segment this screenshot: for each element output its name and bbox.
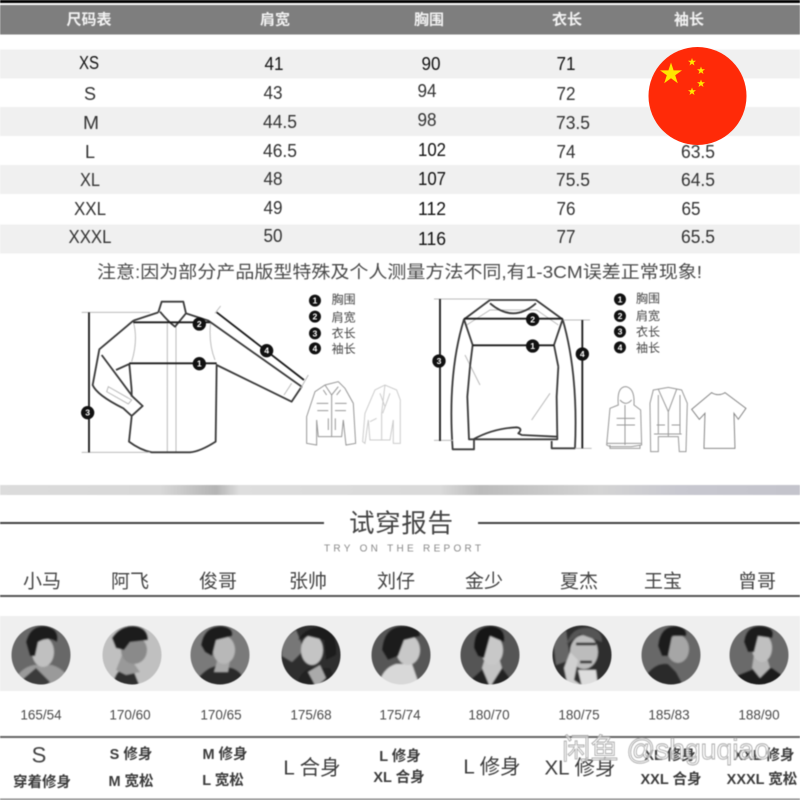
row: XXXL	[0, 224, 800, 254]
row: XL: 48	[264, 169, 282, 189]
fit report row: XL 修身	[544, 756, 616, 780]
height / weight row: 180/70	[468, 708, 510, 722]
icon: hoodie	[607, 387, 642, 448]
names row: 曾哥	[738, 570, 776, 592]
names row: 俊哥	[199, 570, 237, 592]
legend: 衣长	[332, 325, 356, 340]
badge 4: 4	[264, 346, 269, 356]
measure guides	[434, 299, 592, 448]
fit report row: M 宽松	[108, 772, 154, 790]
legend: 1	[618, 294, 623, 304]
watermark: 闲鱼 @shguqiao	[562, 733, 770, 766]
fit report row: L 修身	[379, 747, 421, 765]
table header: 胸围	[414, 12, 444, 28]
badge 1: 1	[530, 341, 535, 351]
legend	[614, 291, 660, 355]
row: XXXL: 77	[556, 227, 576, 247]
row: S	[84, 81, 576, 104]
row: XXXL: 50	[264, 226, 282, 246]
fit report row: XL 修身	[644, 746, 696, 764]
portrait: 小马	[9, 623, 73, 687]
measurement note: 注意:因为部分产品版型特殊及个人测量方法不同,有1-3CM误差正常现象!	[97, 262, 702, 282]
row: XXL: XXL	[74, 199, 106, 219]
measure lines	[89, 312, 304, 452]
icon: blazer	[363, 385, 400, 443]
height / weight row	[0, 708, 800, 738]
fit report row: L 修身	[463, 756, 521, 778]
table header: 袖长	[674, 10, 704, 28]
legend: 衣长	[636, 324, 660, 339]
badge 1: 1	[197, 359, 202, 369]
badge 4	[260, 344, 273, 357]
table header	[0, 5, 800, 34]
badge 3	[81, 406, 94, 419]
fit report row: XXXL 宽松	[727, 770, 798, 788]
row: XL: XL	[80, 170, 100, 190]
legend: 1	[313, 296, 318, 306]
sweater outline	[451, 300, 576, 449]
badge 1	[193, 357, 206, 370]
row: XXXL: 116	[418, 229, 446, 249]
height / weight row: 188/90	[738, 708, 780, 722]
row: M: 44.5	[263, 112, 297, 132]
fit report row: S	[32, 742, 46, 768]
fit report row: M 修身	[202, 745, 248, 763]
legend: 2	[313, 312, 318, 322]
fit report row: L 宽松	[202, 771, 244, 789]
row: XXL: 49	[264, 198, 282, 218]
height / weight row: 175/68	[290, 708, 332, 722]
legend	[309, 291, 356, 356]
names row: 夏杰	[560, 570, 598, 592]
height / weight row: 170/65	[200, 708, 242, 722]
names row	[0, 570, 800, 597]
legend: 肩宽	[332, 309, 356, 324]
height / weight row: 185/83	[648, 708, 690, 722]
fit report row: XXL 修身	[734, 746, 794, 764]
names row: 刘仔	[377, 570, 415, 592]
table header: 尺码表	[66, 10, 112, 28]
badge 4: 4	[580, 349, 585, 359]
row: XXL: 76	[556, 199, 576, 219]
legend: 肩宽	[636, 308, 660, 323]
diagram: shirt measurement	[81, 291, 400, 452]
measure lines	[440, 299, 582, 448]
row: XXXL: 65.5	[681, 227, 715, 247]
row: S: 72	[556, 84, 576, 104]
row: L: 46.5	[263, 141, 297, 161]
fit report row: XL 合身	[373, 768, 425, 786]
icon: t-shirt	[692, 393, 746, 448]
names row: 阿飞	[111, 570, 149, 592]
badge 3	[432, 354, 446, 368]
portrait: 张帅	[279, 623, 343, 687]
row: XXL	[74, 198, 700, 219]
row: XXL: 65	[682, 199, 700, 219]
portrait: 夏杰	[550, 623, 614, 687]
badge 2: 2	[197, 319, 202, 329]
diagram: sweater measurement	[432, 291, 746, 452]
row: L: 102	[418, 140, 446, 160]
badge 1	[526, 339, 539, 353]
row: XS: 90	[422, 54, 440, 74]
row: XL	[0, 165, 800, 194]
portrait: 刘仔	[370, 624, 432, 684]
table header: 衣长	[552, 10, 582, 28]
row: M: M	[83, 113, 99, 133]
row: L: 74	[556, 142, 576, 162]
decorative gray band	[0, 485, 800, 495]
height / weight row: 170/60	[109, 708, 151, 722]
icon: cardigan	[650, 387, 687, 452]
row: M: 73.5	[556, 113, 590, 133]
badge 2: 2	[530, 314, 535, 324]
legend: 胸围	[332, 291, 356, 306]
row: XS: 41	[264, 54, 284, 74]
fit report row	[0, 742, 800, 800]
row: L	[85, 140, 715, 162]
row: L: 63.5	[681, 142, 715, 162]
row: XL: 64.5	[681, 170, 715, 190]
portrait: 俊哥	[188, 623, 252, 687]
table header: 肩宽	[260, 10, 290, 28]
badge 3: 3	[85, 408, 90, 418]
row: XS	[0, 50, 800, 78]
legend: 胸围	[636, 291, 660, 306]
row: L: L	[85, 142, 95, 162]
row: XXL: 112	[418, 199, 446, 219]
measure guides	[82, 306, 308, 452]
icon: denim jacket	[307, 382, 356, 445]
names row: 张帅	[289, 570, 327, 592]
section heading: TRY ON THE REPORT	[324, 544, 481, 554]
height / weight row: 165/54	[20, 708, 62, 722]
portrait: 金少	[458, 623, 522, 687]
row: M	[0, 107, 800, 136]
names row: 小马	[23, 570, 61, 592]
fit report row: XXL 合身	[641, 770, 701, 788]
legend: 3	[313, 328, 318, 338]
row: XS: XS	[79, 53, 99, 73]
height / weight row: 180/75	[558, 708, 600, 722]
portrait: 曾哥	[727, 623, 791, 687]
row: S: 43	[264, 83, 282, 103]
top black rule	[0, 0, 800, 3]
size table	[0, 5, 800, 254]
legend: 2	[618, 311, 623, 321]
names row: 王宝	[644, 570, 682, 592]
badge 3: 3	[437, 356, 442, 366]
section heading: 试穿报告	[349, 510, 453, 538]
legend: 4	[618, 342, 623, 352]
legend: 3	[618, 327, 623, 337]
fit report row: L 合身	[283, 756, 341, 780]
names row: 金少	[465, 570, 503, 592]
badge 2	[526, 313, 539, 326]
row: S: S	[84, 84, 96, 104]
fit report row: S 修身	[110, 745, 152, 763]
portrait: 阿飞	[102, 625, 162, 686]
row: XL: 75.5	[556, 170, 590, 190]
legend: 袖长	[636, 340, 660, 355]
section heading	[0, 510, 800, 554]
row: XXXL: XXXL	[68, 227, 112, 247]
badge 2	[193, 317, 206, 331]
badge 4	[576, 347, 589, 361]
fit report row: 穿着修身	[13, 773, 71, 791]
shirt outline	[93, 302, 302, 452]
row: M: 98	[418, 110, 436, 130]
portrait: 王宝	[639, 623, 703, 687]
row: XL: 107	[418, 169, 446, 189]
portrait band	[0, 616, 800, 691]
legend: 袖长	[332, 341, 356, 356]
row: XS: 71	[556, 54, 576, 74]
height / weight row: 175/74	[379, 708, 421, 722]
legend: 4	[313, 343, 318, 353]
row: S: 94	[418, 81, 436, 101]
